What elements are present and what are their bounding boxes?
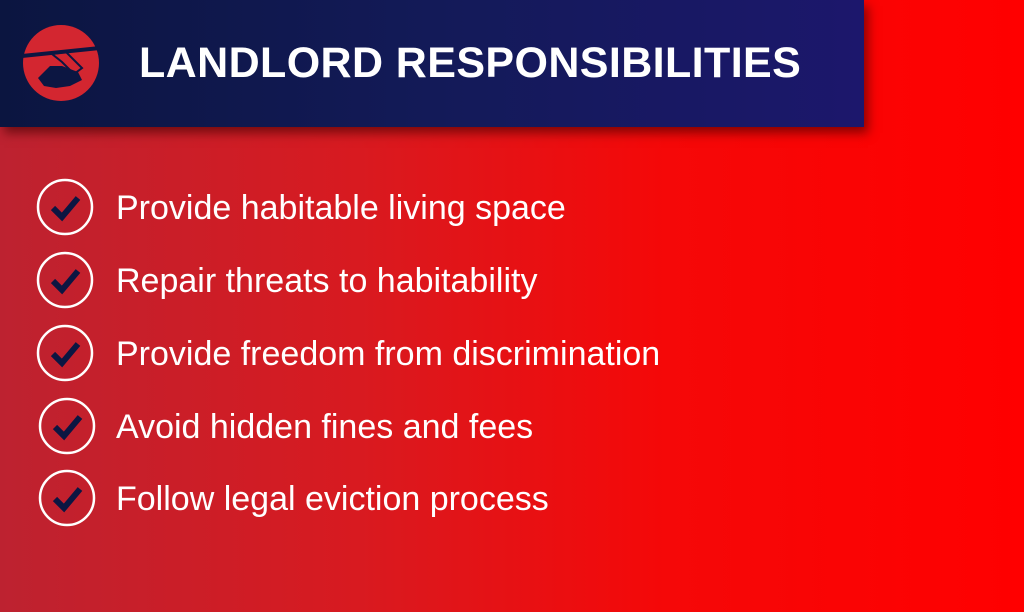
list item 1: [36, 178, 566, 236]
list item 5: [38, 470, 549, 526]
list item 3: [36, 324, 660, 382]
list item 2: [36, 252, 538, 308]
list item 3: Provide freedom from discrimination: [116, 335, 660, 373]
list item 5: Follow legal eviction process: [116, 480, 549, 518]
list item 1: Provide habitable living space: [116, 189, 566, 227]
list item 4: Avoid hidden fines and fees: [116, 408, 533, 446]
icon: handshake: [23, 25, 99, 101]
title: LANDLORD RESPONSIBILITIES: [139, 39, 801, 87]
list item 2: Repair threats to habitability: [116, 262, 537, 300]
header banner: [0, 0, 864, 127]
list item 4: [38, 398, 533, 454]
